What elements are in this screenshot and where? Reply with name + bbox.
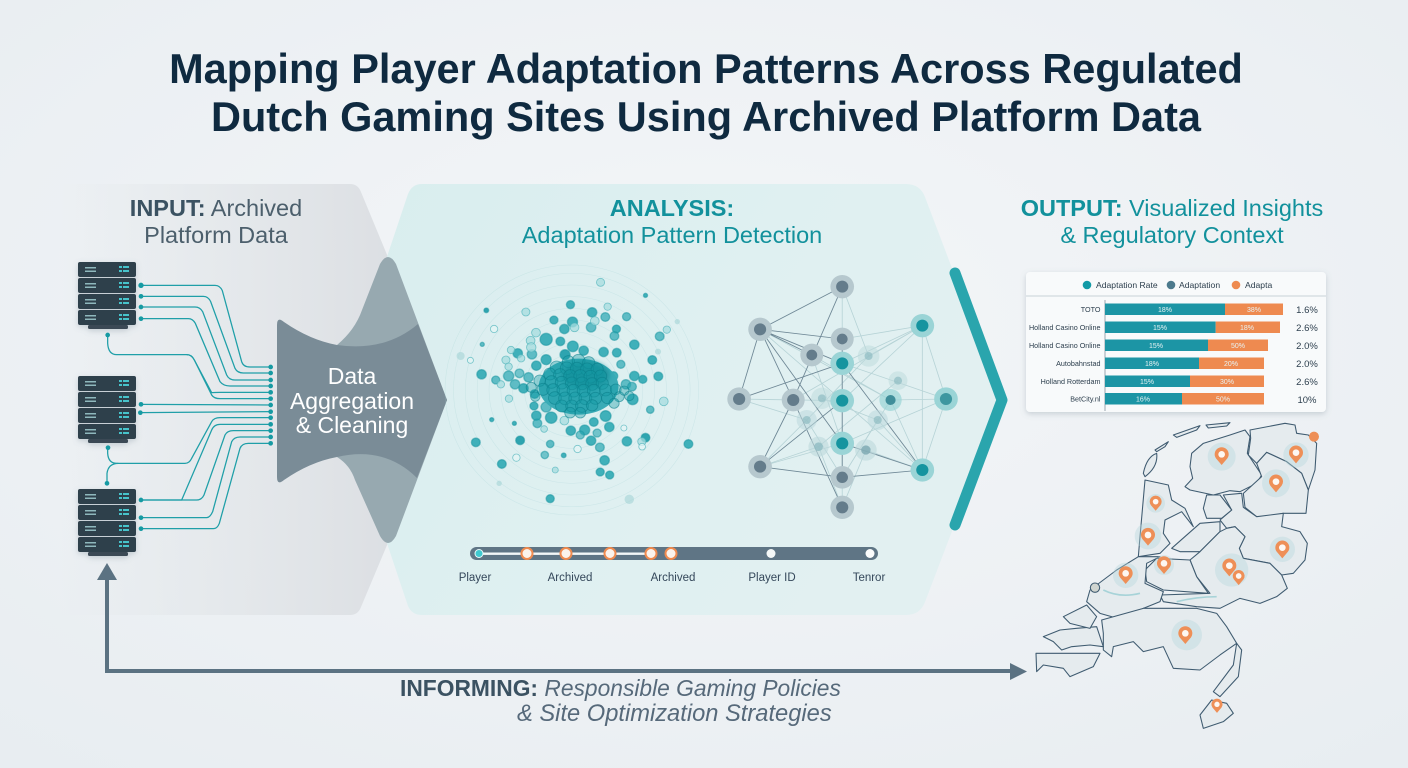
chart legend: Adapta bbox=[1245, 280, 1272, 290]
output heading: OUTPUT: Visualized Insights bbox=[1021, 195, 1323, 221]
timeline label: Archived 2: Archived bbox=[651, 572, 695, 584]
bar values: 18% bbox=[1158, 307, 1172, 314]
row percentages: 10% bbox=[1297, 395, 1317, 406]
chart legend bbox=[1083, 280, 1272, 290]
bars teal bbox=[1105, 304, 1225, 404]
map: Netherlands bbox=[1036, 423, 1319, 728]
row percentages: 2.6% bbox=[1296, 323, 1318, 334]
row percentages: 2.6% bbox=[1296, 377, 1318, 388]
row labels: Holland Casino Online bbox=[1029, 341, 1100, 350]
panel: input background bbox=[60, 184, 390, 615]
funnel: data aggregation and cleaning: & Cleaning bbox=[296, 412, 408, 438]
row labels: Holland Rotterdam bbox=[1041, 377, 1101, 386]
map pins bbox=[1119, 432, 1319, 713]
bar values: 15% bbox=[1153, 325, 1167, 332]
bar values: 50% bbox=[1216, 396, 1230, 404]
data connection wires bbox=[105, 283, 273, 531]
output heading bbox=[1021, 195, 1323, 248]
bar values: 18% bbox=[1145, 361, 1159, 368]
chart: scatter cluster bbox=[445, 265, 699, 515]
funnel: data aggregation and cleaning: Data bbox=[328, 363, 376, 389]
row percentages: 1.6% bbox=[1296, 305, 1318, 316]
timeline label: Archived 1: Archived bbox=[548, 572, 592, 584]
panel: analysis background bbox=[339, 184, 1002, 615]
title: Mapping Player Adaptation Patterns Across Regulated bbox=[169, 45, 1243, 92]
row labels: Autobahnstad bbox=[1056, 359, 1100, 368]
informing caption: & Site Optimization Strategies bbox=[517, 701, 832, 727]
row percentages bbox=[1296, 305, 1318, 406]
output heading: & Regulatory Context bbox=[1060, 222, 1284, 248]
bar values bbox=[1136, 307, 1261, 404]
row percentages: 2.0% bbox=[1296, 341, 1318, 352]
bar values: 18% bbox=[1240, 325, 1254, 332]
icon: server stack 1 bbox=[78, 262, 136, 329]
timeline label: Player ID: Player ID bbox=[748, 572, 796, 584]
bar values: 15% bbox=[1149, 343, 1163, 350]
row labels: BetCity.nl bbox=[1070, 394, 1101, 404]
bar values: 50% bbox=[1231, 343, 1245, 350]
row labels: TOTO bbox=[1081, 305, 1101, 314]
arrow: output chevron bbox=[955, 273, 1002, 525]
bar values: 30% bbox=[1220, 379, 1234, 386]
row labels bbox=[1029, 305, 1101, 404]
chart legend: Adaptation bbox=[1179, 280, 1220, 290]
informing caption: INFORMING: Responsible Gaming Policies bbox=[400, 675, 841, 701]
informing caption bbox=[400, 675, 841, 727]
arrow: feedback loop bbox=[97, 563, 1027, 680]
timeline label: Player: Player bbox=[459, 572, 491, 584]
bar values: 20% bbox=[1224, 361, 1238, 368]
row labels: Holland Casino Online bbox=[1029, 323, 1100, 332]
title bbox=[169, 45, 1243, 140]
analysis heading: ANALYSIS: bbox=[610, 195, 734, 221]
card: bar chart bbox=[1026, 272, 1326, 412]
title: Dutch Gaming Sites Using Archived Platform Data bbox=[211, 93, 1202, 140]
funnel: data aggregation and cleaning bbox=[277, 257, 447, 543]
icon: server stack 3 bbox=[78, 489, 136, 556]
analysis heading bbox=[522, 195, 822, 248]
bars orange bbox=[1182, 304, 1283, 404]
row percentages: 2.0% bbox=[1296, 359, 1318, 370]
input heading bbox=[130, 195, 302, 248]
bar values: 15% bbox=[1140, 379, 1154, 386]
timeline bbox=[459, 547, 885, 584]
timeline label: Tenror: Tenror bbox=[853, 572, 885, 584]
bar values: 16% bbox=[1136, 396, 1150, 404]
chart: network graph bbox=[727, 275, 958, 519]
icon: server stack 2 bbox=[78, 376, 136, 443]
chart legend: Adaptation Rate bbox=[1096, 280, 1158, 290]
analysis heading: Adaptation Pattern Detection bbox=[522, 222, 822, 248]
bar values: 38% bbox=[1247, 307, 1261, 314]
input heading: Platform Data bbox=[144, 222, 289, 248]
input heading: INPUT: Archived bbox=[130, 195, 302, 221]
funnel: data aggregation and cleaning: Aggregation bbox=[290, 388, 414, 414]
